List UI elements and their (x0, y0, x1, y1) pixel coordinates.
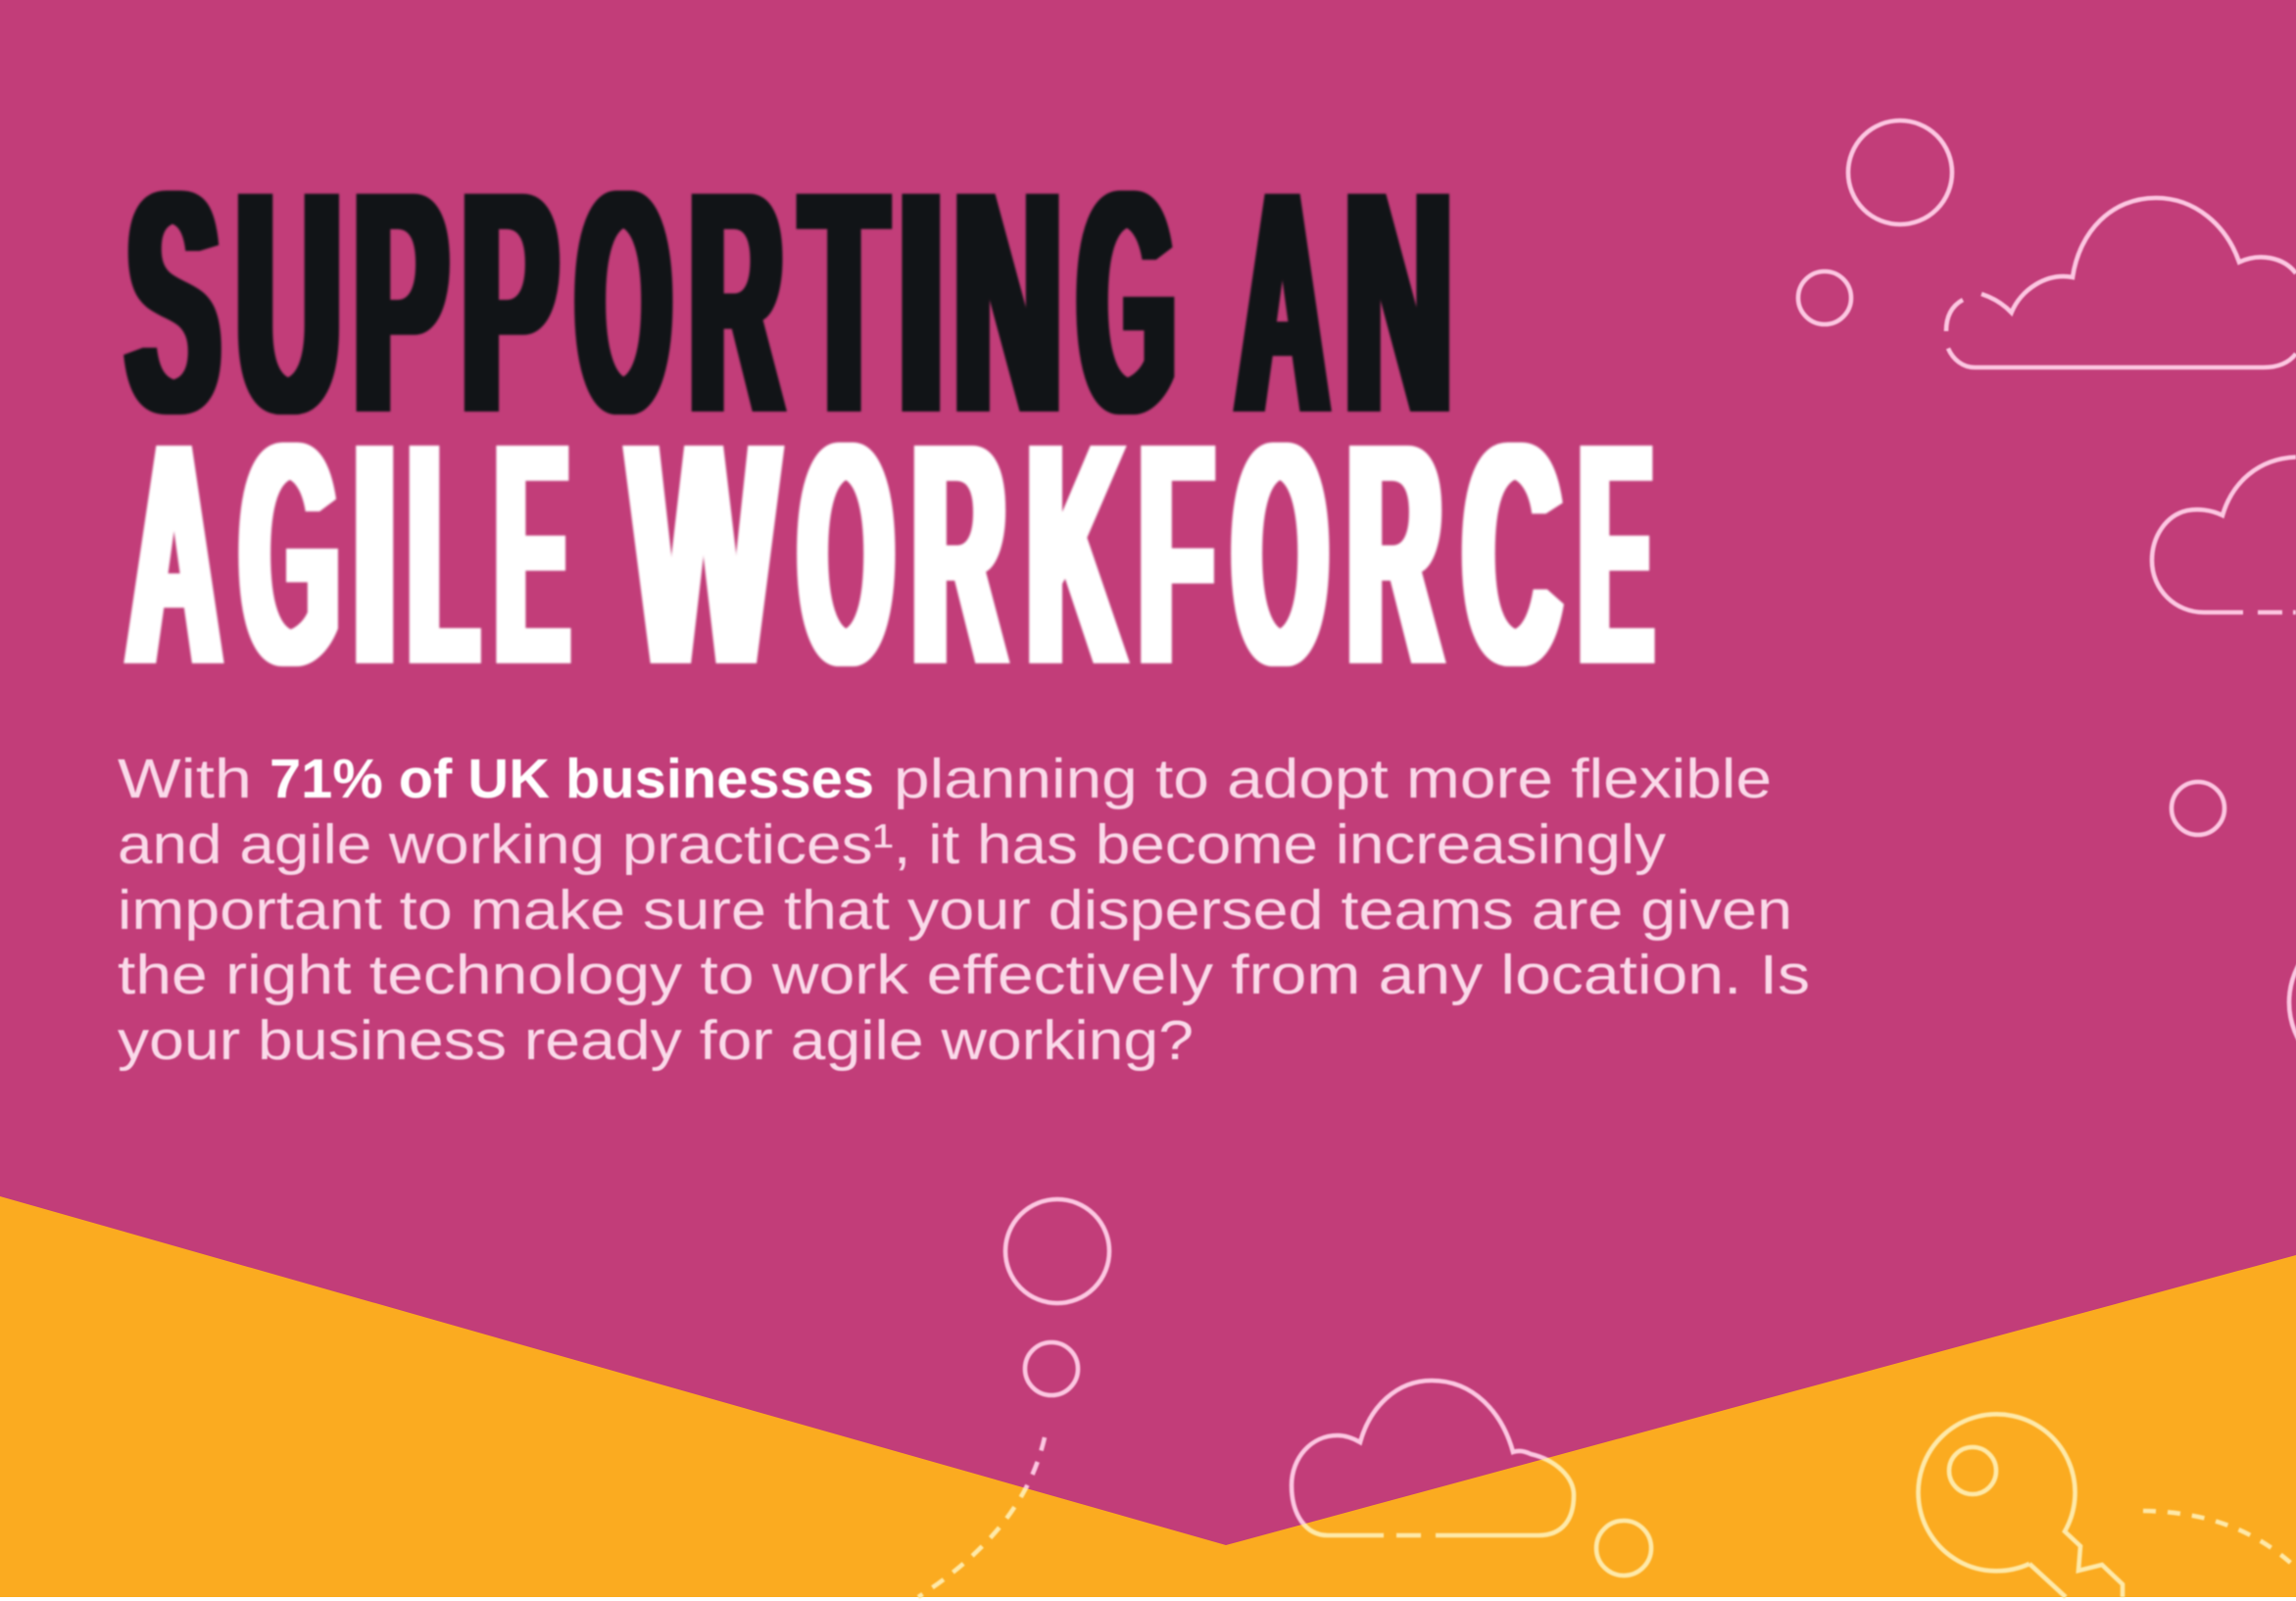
icon: partial circle at right edge (2289, 924, 2296, 1081)
intro text block: With (118, 748, 252, 810)
icon: large bubble top right (1848, 121, 1952, 224)
title line 1: A (1237, 126, 1328, 479)
title line 2: E (496, 378, 568, 731)
title line 2: R (1347, 378, 1441, 731)
title line 1: G (1078, 126, 1175, 479)
title line 2: O (1233, 378, 1328, 731)
icon: cloud right edge (2152, 457, 2296, 612)
icon: key (1919, 1414, 2123, 1597)
title line 2: A (127, 378, 220, 731)
title line 2: L (408, 378, 477, 731)
icon: small bubble on orange (1596, 1521, 1651, 1576)
title line 1: I (898, 126, 945, 479)
title line 2: E (1580, 378, 1652, 731)
title line 1: N (1344, 126, 1452, 479)
title line 1 (122, 126, 1452, 479)
title line 2: W (629, 378, 778, 731)
title line 2: G (239, 378, 339, 731)
title line 2: I (352, 378, 397, 731)
icon: cloud straddling the chevron (1292, 1381, 1574, 1535)
icon: cloud top right (1946, 198, 2296, 367)
title line 2: C (1463, 378, 1561, 731)
intro text block: important to make sure that your dispersed teams are given (118, 879, 1792, 942)
intro text block: the right technology to work effectively from any location. Is (118, 944, 1810, 1006)
title line 2: O (799, 378, 894, 731)
title line 1: U (236, 126, 341, 479)
title line 2: R (912, 378, 1005, 731)
title (122, 126, 1656, 731)
icon: small bubble centre (1025, 1342, 1078, 1395)
dashed trail from key (2143, 1511, 2296, 1568)
title line 2 (122, 378, 1656, 731)
background: orange chevron band (0, 1196, 2296, 1597)
title line 1: S (126, 126, 220, 479)
title line 1: T (802, 126, 887, 479)
intro text block: and agile working practices¹, it has become increasingly (118, 813, 1667, 876)
title line 1: N (953, 126, 1062, 479)
icon: small bubble right (2172, 782, 2224, 835)
title line 1: O (576, 126, 670, 479)
title line 2: F (1140, 378, 1213, 731)
icon: large bubble centre (1005, 1199, 1109, 1303)
intro text block (118, 748, 1810, 1072)
title line 1: P (462, 126, 558, 479)
title line 1: P (354, 126, 448, 479)
title line 2: K (1027, 378, 1124, 731)
icon: small bubble top right (1798, 271, 1851, 324)
title line 1: R (690, 126, 783, 479)
intro text block: your business ready for agile working? (118, 1009, 1194, 1072)
intro text block: planning to adopt more flexible (894, 748, 1772, 810)
dashed trail from bubbles (918, 1437, 1045, 1597)
intro text block: 71% of UK businesses (269, 748, 874, 810)
